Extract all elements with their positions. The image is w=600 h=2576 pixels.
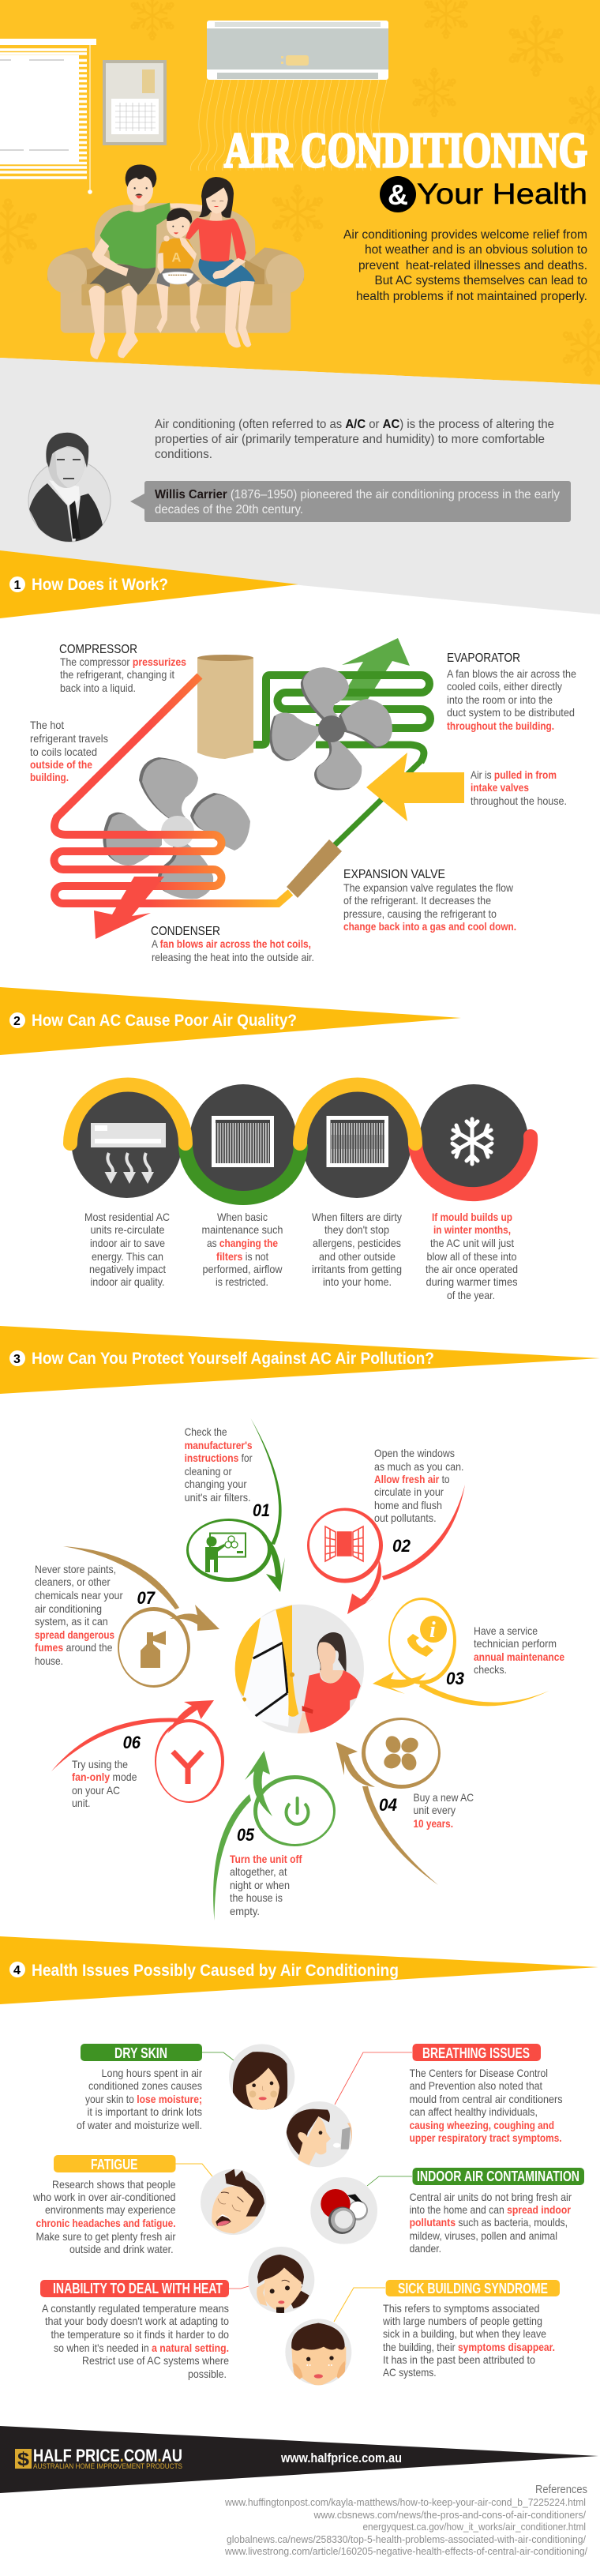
text: evaporator bbox=[447, 652, 576, 732]
text: intake air: throughout the house. bbox=[471, 794, 567, 807]
icon: phone and info bbox=[407, 1616, 447, 1657]
tip 01 swoosh bbox=[186, 1418, 285, 1592]
subtitle: & Your Health: Your Health bbox=[417, 178, 587, 210]
tip 07: chemicals: house. bbox=[35, 1654, 63, 1667]
text: recirculation: Most residential AC bbox=[84, 1211, 170, 1223]
panel: fatigue: who work in over air-conditioned bbox=[32, 2191, 176, 2203]
yellow intake arrow bbox=[366, 753, 464, 821]
tip 07: chemicals: air conditioning bbox=[35, 1602, 102, 1615]
panel: sick building syndrome: It has in the past been attributed to bbox=[383, 2353, 535, 2366]
tip 01: filters: unit's air filters. bbox=[185, 1491, 251, 1504]
text: basic maintenance: is restricted. bbox=[216, 1275, 268, 1288]
panel: dry skin bbox=[77, 2044, 234, 2131]
tip 03: maintenance: technician perform bbox=[474, 1637, 557, 1650]
banner: section 3 heading bbox=[0, 1326, 600, 1394]
banner: section 4 heading: 4 bbox=[13, 1964, 21, 1977]
mother bbox=[186, 177, 255, 347]
tip 05: turn off: night or when bbox=[230, 1879, 290, 1891]
icon: Y fan mode bbox=[173, 1752, 202, 1784]
tip 05: turn off: empty. bbox=[230, 1905, 260, 1917]
panel: fatigue: outside and drink water. bbox=[69, 2243, 174, 2255]
text: air conditioning definition: Air conditioning (often referred to as A/C or AC) is the process of altering the bbox=[155, 418, 554, 431]
tip 03: maintenance: annual maintenance bbox=[474, 1650, 564, 1663]
panel: fatigue: FATIGUE bbox=[91, 2157, 137, 2172]
tip 01: filters: instructions for bbox=[185, 1451, 253, 1464]
panel: sick building syndrome: AC systems. bbox=[383, 2366, 437, 2379]
tip 02: windows: home and flush bbox=[374, 1499, 442, 1511]
panel: indoor air contamination: mildew, viruses, pollen and animal bbox=[410, 2229, 557, 2242]
panel: dry skin: it is important to drink lots bbox=[87, 2105, 202, 2118]
text: dirty filters: When filters are dirty bbox=[312, 1211, 402, 1223]
tip 06: fan-only: 06 bbox=[123, 1733, 141, 1752]
tip 07: chemicals: Never store paints, bbox=[35, 1563, 116, 1575]
tip 01: filters: Check the bbox=[185, 1425, 227, 1438]
text: intake air bbox=[471, 768, 567, 807]
face: sick building bbox=[285, 2319, 351, 2386]
callout: Willis Carrier: decades of the 20th century. bbox=[155, 503, 303, 516]
panel: fatigue: environments may experience bbox=[45, 2203, 176, 2216]
tip 01: filters: 01 bbox=[253, 1500, 270, 1520]
panel: fatigue: Make sure to get plenty fresh air bbox=[36, 2230, 176, 2243]
condenser fan bbox=[103, 757, 250, 899]
text: air conditioning definition: conditions. bbox=[155, 448, 212, 461]
tip 05: turn off: 05 bbox=[237, 1825, 255, 1845]
tip 07: chemicals: spread dangerous bbox=[35, 1628, 114, 1641]
logo: half price: $ bbox=[17, 2449, 30, 2470]
faces: health issue illustrations bbox=[201, 2044, 377, 2244]
tip 06: fan-only bbox=[51, 1700, 224, 1809]
panel: inability to deal with heat: possible. bbox=[188, 2368, 227, 2380]
text: references bbox=[224, 2483, 587, 2557]
chart: four linked circles bbox=[70, 1084, 531, 1198]
panel: dry skin: of water and moisturize well. bbox=[77, 2119, 202, 2131]
tip 05 swoosh bbox=[213, 1751, 336, 1921]
text: dirty filters bbox=[312, 1211, 402, 1288]
text: hot refrigerant bbox=[30, 719, 108, 783]
compressor bbox=[197, 655, 253, 759]
text: expansion valve: The expansion valve regulates the flow bbox=[343, 881, 514, 894]
panel: inability to deal with heat: that your body doesn't work at adapting to bbox=[45, 2315, 229, 2327]
tip 02: windows: out pollutants. bbox=[374, 1511, 437, 1524]
tip 07: chemicals: 07 bbox=[137, 1588, 156, 1608]
icon: air conditioner unit bbox=[191, 21, 388, 171]
tip 06 swoosh bbox=[51, 1700, 224, 1803]
tip 01: filters: changing your bbox=[185, 1478, 247, 1490]
tip 04: new unit: 10 years. bbox=[414, 1817, 453, 1830]
text: references: globalnews.ca/news/258330/top-5-health-problems-associated-with-air-conditioning/ bbox=[227, 2533, 586, 2545]
panel: inability to deal with heat: the temperature so it finds it harder to do bbox=[51, 2328, 229, 2341]
text: hot refrigerant: building. bbox=[30, 771, 69, 783]
banner: section 3 heading: 3 bbox=[13, 1353, 21, 1366]
callout: Willis Carrier: Willis Carrier (1876–1950) pioneered the air conditioning process in the early bbox=[155, 488, 560, 501]
text: expansion valve: EXPANSION VALVE bbox=[343, 868, 445, 881]
icon: notice board and calendar bbox=[103, 60, 167, 145]
text: hot refrigerant: The hot bbox=[30, 719, 64, 731]
text: basic maintenance: When basic bbox=[217, 1211, 268, 1223]
text: hero intro: Air conditioning provides welcome relief from bbox=[343, 228, 587, 242]
panel: inability to deal with heat bbox=[40, 2280, 249, 2380]
text: basic maintenance: performed, airflow bbox=[202, 1263, 283, 1275]
red condenser coil pipe bbox=[54, 676, 291, 903]
banner: footer bbox=[0, 2426, 598, 2493]
panel: sick building syndrome: This refers to symptoms associated bbox=[383, 2302, 540, 2315]
text: evaporator: throughout the building. bbox=[447, 719, 554, 732]
panel: sick building syndrome: sick in a building, but when they leave bbox=[383, 2327, 546, 2340]
tip 05: turn off bbox=[213, 1751, 336, 1921]
text: recirculation: negatively impact bbox=[89, 1263, 166, 1275]
text: mould: in winter months, bbox=[433, 1223, 511, 1236]
banner: section 2 heading: How Can AC Cause Poor Air Quality? bbox=[32, 1012, 297, 1030]
icon: pollutant molecule bbox=[310, 2177, 377, 2244]
icon: ac unit blowing air bbox=[91, 1123, 166, 1184]
panel: sick building syndrome: SICK BUILDING SYNDROME bbox=[398, 2281, 548, 2296]
subtitle: & Your Health bbox=[380, 176, 587, 212]
text: mould: the air once operated bbox=[426, 1263, 518, 1275]
text: mould: during warmer times bbox=[426, 1275, 518, 1288]
panel: breathing issues: causing wheezing, coughing and bbox=[410, 2119, 554, 2131]
icon: spray can bbox=[141, 1631, 166, 1668]
text: hero intro: prevent heat-related illnesses and deaths. bbox=[358, 259, 587, 272]
text: mould: blow all of these into bbox=[426, 1250, 517, 1263]
banner: section 3 heading: How Can You Protect Yourself Against AC Air Pollution? bbox=[32, 1350, 434, 1368]
icon: open window bbox=[325, 1526, 363, 1561]
panel: sick building syndrome: with large numbers of people getting bbox=[382, 2315, 542, 2327]
tip 04: new unit: Buy a new AC bbox=[414, 1791, 474, 1804]
text: condenser: releasing the heat into the outside air. bbox=[152, 951, 314, 963]
tip 07 swoosh bbox=[63, 1546, 219, 1688]
tip 03: maintenance: checks. bbox=[474, 1663, 507, 1676]
panel: sick building syndrome: the building, their symptoms disappear. bbox=[383, 2341, 555, 2353]
text: compressor: back into a liquid. bbox=[60, 682, 136, 694]
face: heat inability bbox=[248, 2247, 314, 2314]
panel: breathing issues: and Prevention also noted that bbox=[410, 2079, 542, 2092]
panel: inability to deal with heat: A constantly regulated temperature means bbox=[42, 2302, 229, 2315]
tip 07: chemicals: cleaners, or other bbox=[35, 1575, 111, 1588]
tip 07: chemicals: fumes around the bbox=[35, 1641, 113, 1654]
banner: section 4 heading: Health Issues Possibly Caused by Air Conditioning bbox=[32, 1962, 399, 1980]
banner: section 2 heading: 2 bbox=[13, 1015, 21, 1028]
father bbox=[88, 164, 171, 359]
icon: snowflake bbox=[452, 1119, 492, 1164]
text: expansion valve bbox=[343, 868, 516, 933]
text: basic maintenance: as changing the bbox=[207, 1237, 278, 1249]
tip 02: windows: Open the windows bbox=[374, 1447, 455, 1459]
tip 03 swoosh bbox=[373, 1598, 549, 1706]
text: evaporator: A fan blows the air across the bbox=[447, 667, 576, 680]
panel: breathing issues: can affect healthy individuals, bbox=[410, 2105, 538, 2118]
text: intake air: Air is pulled in from bbox=[471, 768, 557, 781]
expansion valve bbox=[287, 839, 342, 898]
text: hot refrigerant: to coils located bbox=[30, 745, 97, 758]
text: compressor: the refrigerant, changing it bbox=[60, 668, 174, 681]
tip 05: turn off: the house is bbox=[230, 1891, 283, 1904]
panel: dry skin: DRY SKIN bbox=[114, 2045, 167, 2061]
tip 06: fan-only: fan-only mode bbox=[72, 1771, 137, 1783]
text: evaporator: duct system to be distributed bbox=[447, 706, 575, 719]
text: hero intro bbox=[343, 228, 587, 303]
text: dirty filters: into your home. bbox=[323, 1275, 392, 1288]
text: condenser: A fan blows air across the hot coils, bbox=[152, 937, 311, 950]
panel: breathing issues: upper respiratory tract symptoms. bbox=[410, 2131, 562, 2144]
panel: inability to deal with heat: so when it's needed in a natural setting. bbox=[54, 2341, 229, 2354]
panel: fatigue bbox=[32, 2155, 212, 2255]
callout: Willis Carrier bbox=[130, 481, 571, 522]
panel: sick building syndrome bbox=[334, 2280, 560, 2379]
tip 01: filters: manufacturer's bbox=[185, 1439, 253, 1451]
face: fatigue yawn bbox=[201, 2169, 266, 2235]
text: hero intro: hot weather and is an obvious solution to bbox=[365, 243, 587, 257]
illustration: family on sofa bbox=[47, 164, 304, 359]
tip 04: new unit: unit every bbox=[414, 1804, 456, 1816]
panel: inability to deal with heat: INABILITY TO DEAL WITH HEAT bbox=[53, 2281, 223, 2296]
panel: dry skin: Long hours spent in air bbox=[101, 2067, 202, 2079]
panel: indoor air contamination: into the home and can spread indoor bbox=[410, 2203, 571, 2216]
panel: inability to deal with heat: Restrict use of AC systems where bbox=[82, 2354, 229, 2367]
tip 04: new unit bbox=[336, 1718, 474, 1885]
text: dirty filters: allergens, pesticides bbox=[313, 1237, 401, 1249]
text: expansion valve: change back into a gas and cool down. bbox=[343, 920, 516, 933]
icon: power button bbox=[287, 1798, 308, 1824]
tip 05: turn off: altogether, at bbox=[230, 1865, 287, 1878]
tip 05: turn off: Turn the unit off bbox=[230, 1853, 302, 1865]
text: expansion valve: of the refrigerant. It decreases the bbox=[343, 894, 491, 907]
text: compressor: COMPRESSOR bbox=[59, 643, 137, 656]
portrait: Willis Carrier bbox=[28, 433, 111, 545]
boy bbox=[156, 208, 202, 333]
tip 02: windows: 02 bbox=[392, 1536, 411, 1556]
panel: fatigue: Research shows that people bbox=[52, 2178, 176, 2191]
text: basic maintenance: filters is not bbox=[216, 1250, 268, 1263]
icon: air filter bbox=[212, 1116, 274, 1167]
banner: footer: www.halfprice.com.au bbox=[280, 2450, 402, 2465]
evaporator fan bbox=[269, 667, 392, 790]
panel: indoor air contamination bbox=[367, 2168, 584, 2255]
green coil pipe bbox=[253, 675, 430, 845]
text: hot refrigerant: refrigerant travels bbox=[30, 732, 108, 745]
banner: section 1 heading: 1 bbox=[14, 579, 21, 592]
icon: fan bbox=[381, 1733, 421, 1773]
text: recirculation bbox=[84, 1211, 170, 1288]
text: mould: If mould builds up bbox=[432, 1211, 512, 1223]
icon: window with blinds bbox=[0, 39, 96, 194]
tip 06: fan-only: unit. bbox=[72, 1797, 90, 1809]
text: compressor: The compressor pressurizes bbox=[60, 655, 186, 668]
boy: A bbox=[171, 250, 181, 265]
illustration: woman at window bbox=[234, 1605, 364, 1733]
text: dirty filters: and other outside bbox=[319, 1250, 396, 1263]
green arrow up bbox=[339, 638, 410, 700]
text: hero intro: But AC systems themselves can lead to bbox=[374, 274, 587, 287]
text: hot refrigerant: outside of the bbox=[30, 758, 92, 771]
text: air conditioning definition bbox=[155, 418, 554, 461]
banner: section 1 heading: How Does it Work? bbox=[32, 576, 168, 594]
logo: half price bbox=[15, 2446, 182, 2471]
text: basic maintenance bbox=[202, 1211, 283, 1288]
text: compressor bbox=[59, 643, 186, 694]
red heat arrow bbox=[94, 877, 164, 939]
text: condenser: CONDENSER bbox=[151, 925, 220, 938]
text: mould bbox=[426, 1211, 518, 1301]
banner: section 2 heading bbox=[0, 987, 461, 1055]
text: evaporator: into the room or into the bbox=[447, 693, 553, 706]
banner: section 1 heading bbox=[0, 550, 298, 618]
text: dirty filters: they don't stop bbox=[324, 1223, 389, 1236]
panel: gray intro band bbox=[0, 358, 600, 614]
text: dirty filters: irritants from getting bbox=[312, 1263, 402, 1275]
text: basic maintenance: maintenance such bbox=[202, 1223, 283, 1236]
panel: fatigue: chronic headaches and fatigue. bbox=[36, 2217, 175, 2229]
logo: half price: HALF PRICE.COM.AU bbox=[33, 2446, 182, 2465]
panel: indoor air contamination: dander. bbox=[410, 2242, 441, 2255]
text: hero intro: health problems if not maintained properly. bbox=[356, 290, 587, 303]
logo: half price: AUSTRALIAN HOME IMPROVEMENT PRODUCTS bbox=[33, 2462, 182, 2471]
icon: teacher at board bbox=[205, 1534, 246, 1572]
text: mould: of the year. bbox=[447, 1289, 495, 1301]
panel: hero background bbox=[0, 0, 600, 385]
text: evaporator: cooled coils, either directly bbox=[447, 680, 562, 693]
text: intake air: intake valves bbox=[471, 781, 529, 794]
text: recirculation: indoor air quality. bbox=[90, 1275, 164, 1288]
tip 03: maintenance: Have a service bbox=[474, 1624, 538, 1637]
tip 01: filters: cleaning or bbox=[185, 1465, 232, 1478]
tip 07: chemicals: chemicals near your bbox=[35, 1589, 123, 1602]
tip 03: maintenance bbox=[373, 1598, 564, 1706]
text: mould: the AC unit will just bbox=[430, 1237, 514, 1249]
face: inhaler bbox=[287, 2101, 354, 2167]
text: expansion valve: pressure, causing the refrigerant to bbox=[343, 907, 497, 920]
tip 06: fan-only: on your AC bbox=[72, 1784, 120, 1797]
tip 07: chemicals: system, as it can bbox=[35, 1615, 108, 1628]
text: recirculation: indoor air to save bbox=[90, 1237, 165, 1249]
panel: breathing issues: BREATHING ISSUES bbox=[422, 2045, 530, 2061]
text: evaporator: EVAPORATOR bbox=[447, 652, 520, 665]
tip 02: windows: Allow fresh air to bbox=[374, 1473, 450, 1485]
tip 02: windows: as much as you can. bbox=[374, 1460, 464, 1473]
subtitle: & Your Health: & bbox=[388, 178, 408, 211]
text: condenser bbox=[151, 925, 314, 963]
panel: dry skin: conditioned zones causes bbox=[88, 2079, 202, 2092]
icon: phone and info: i bbox=[429, 1618, 436, 1643]
tip 04 swoosh bbox=[336, 1718, 441, 1885]
tip 07: chemicals bbox=[35, 1546, 219, 1688]
tip 02: windows bbox=[307, 1447, 465, 1614]
text: air conditioning definition: properties of air (primarily temperature and humidity) to more comfortable bbox=[155, 433, 545, 446]
panel: breathing issues bbox=[335, 2044, 563, 2144]
diagram: refrigeration cycle bbox=[54, 638, 464, 939]
text: recirculation: units re-circulate bbox=[90, 1223, 165, 1236]
tip 02 swoosh bbox=[307, 1485, 465, 1614]
face: dry skin bbox=[229, 2044, 294, 2111]
panel: dry skin: your skin to lose moisture; bbox=[85, 2093, 202, 2105]
background snowflakes bbox=[0, 0, 600, 375]
panel: indoor air contamination: pollutants such as bacteria, moulds, bbox=[410, 2216, 568, 2229]
tip 03: maintenance: 03 bbox=[446, 1669, 464, 1688]
tip 02: windows: circulate in your bbox=[374, 1485, 444, 1498]
text: references: www.cbsnews.com/news/the-pros-and-cons-of-air-conditioners/ bbox=[313, 2509, 586, 2521]
icon: dirty air filter bbox=[327, 1116, 388, 1167]
panel: indoor air contamination: Central air units do not bring fresh air bbox=[410, 2191, 572, 2203]
tip 01: filters bbox=[185, 1418, 285, 1592]
tip 06: fan-only: Try using the bbox=[72, 1758, 128, 1771]
text: recirculation: energy. This can bbox=[92, 1250, 163, 1263]
panel: breathing issues: mould from central air conditioners bbox=[410, 2093, 563, 2105]
text: references: References bbox=[535, 2483, 587, 2496]
banner: section 4 heading bbox=[0, 1936, 598, 2004]
panel: breathing issues: The Centers for Disease Control bbox=[410, 2067, 548, 2079]
tip 04: new unit: 04 bbox=[379, 1795, 397, 1815]
